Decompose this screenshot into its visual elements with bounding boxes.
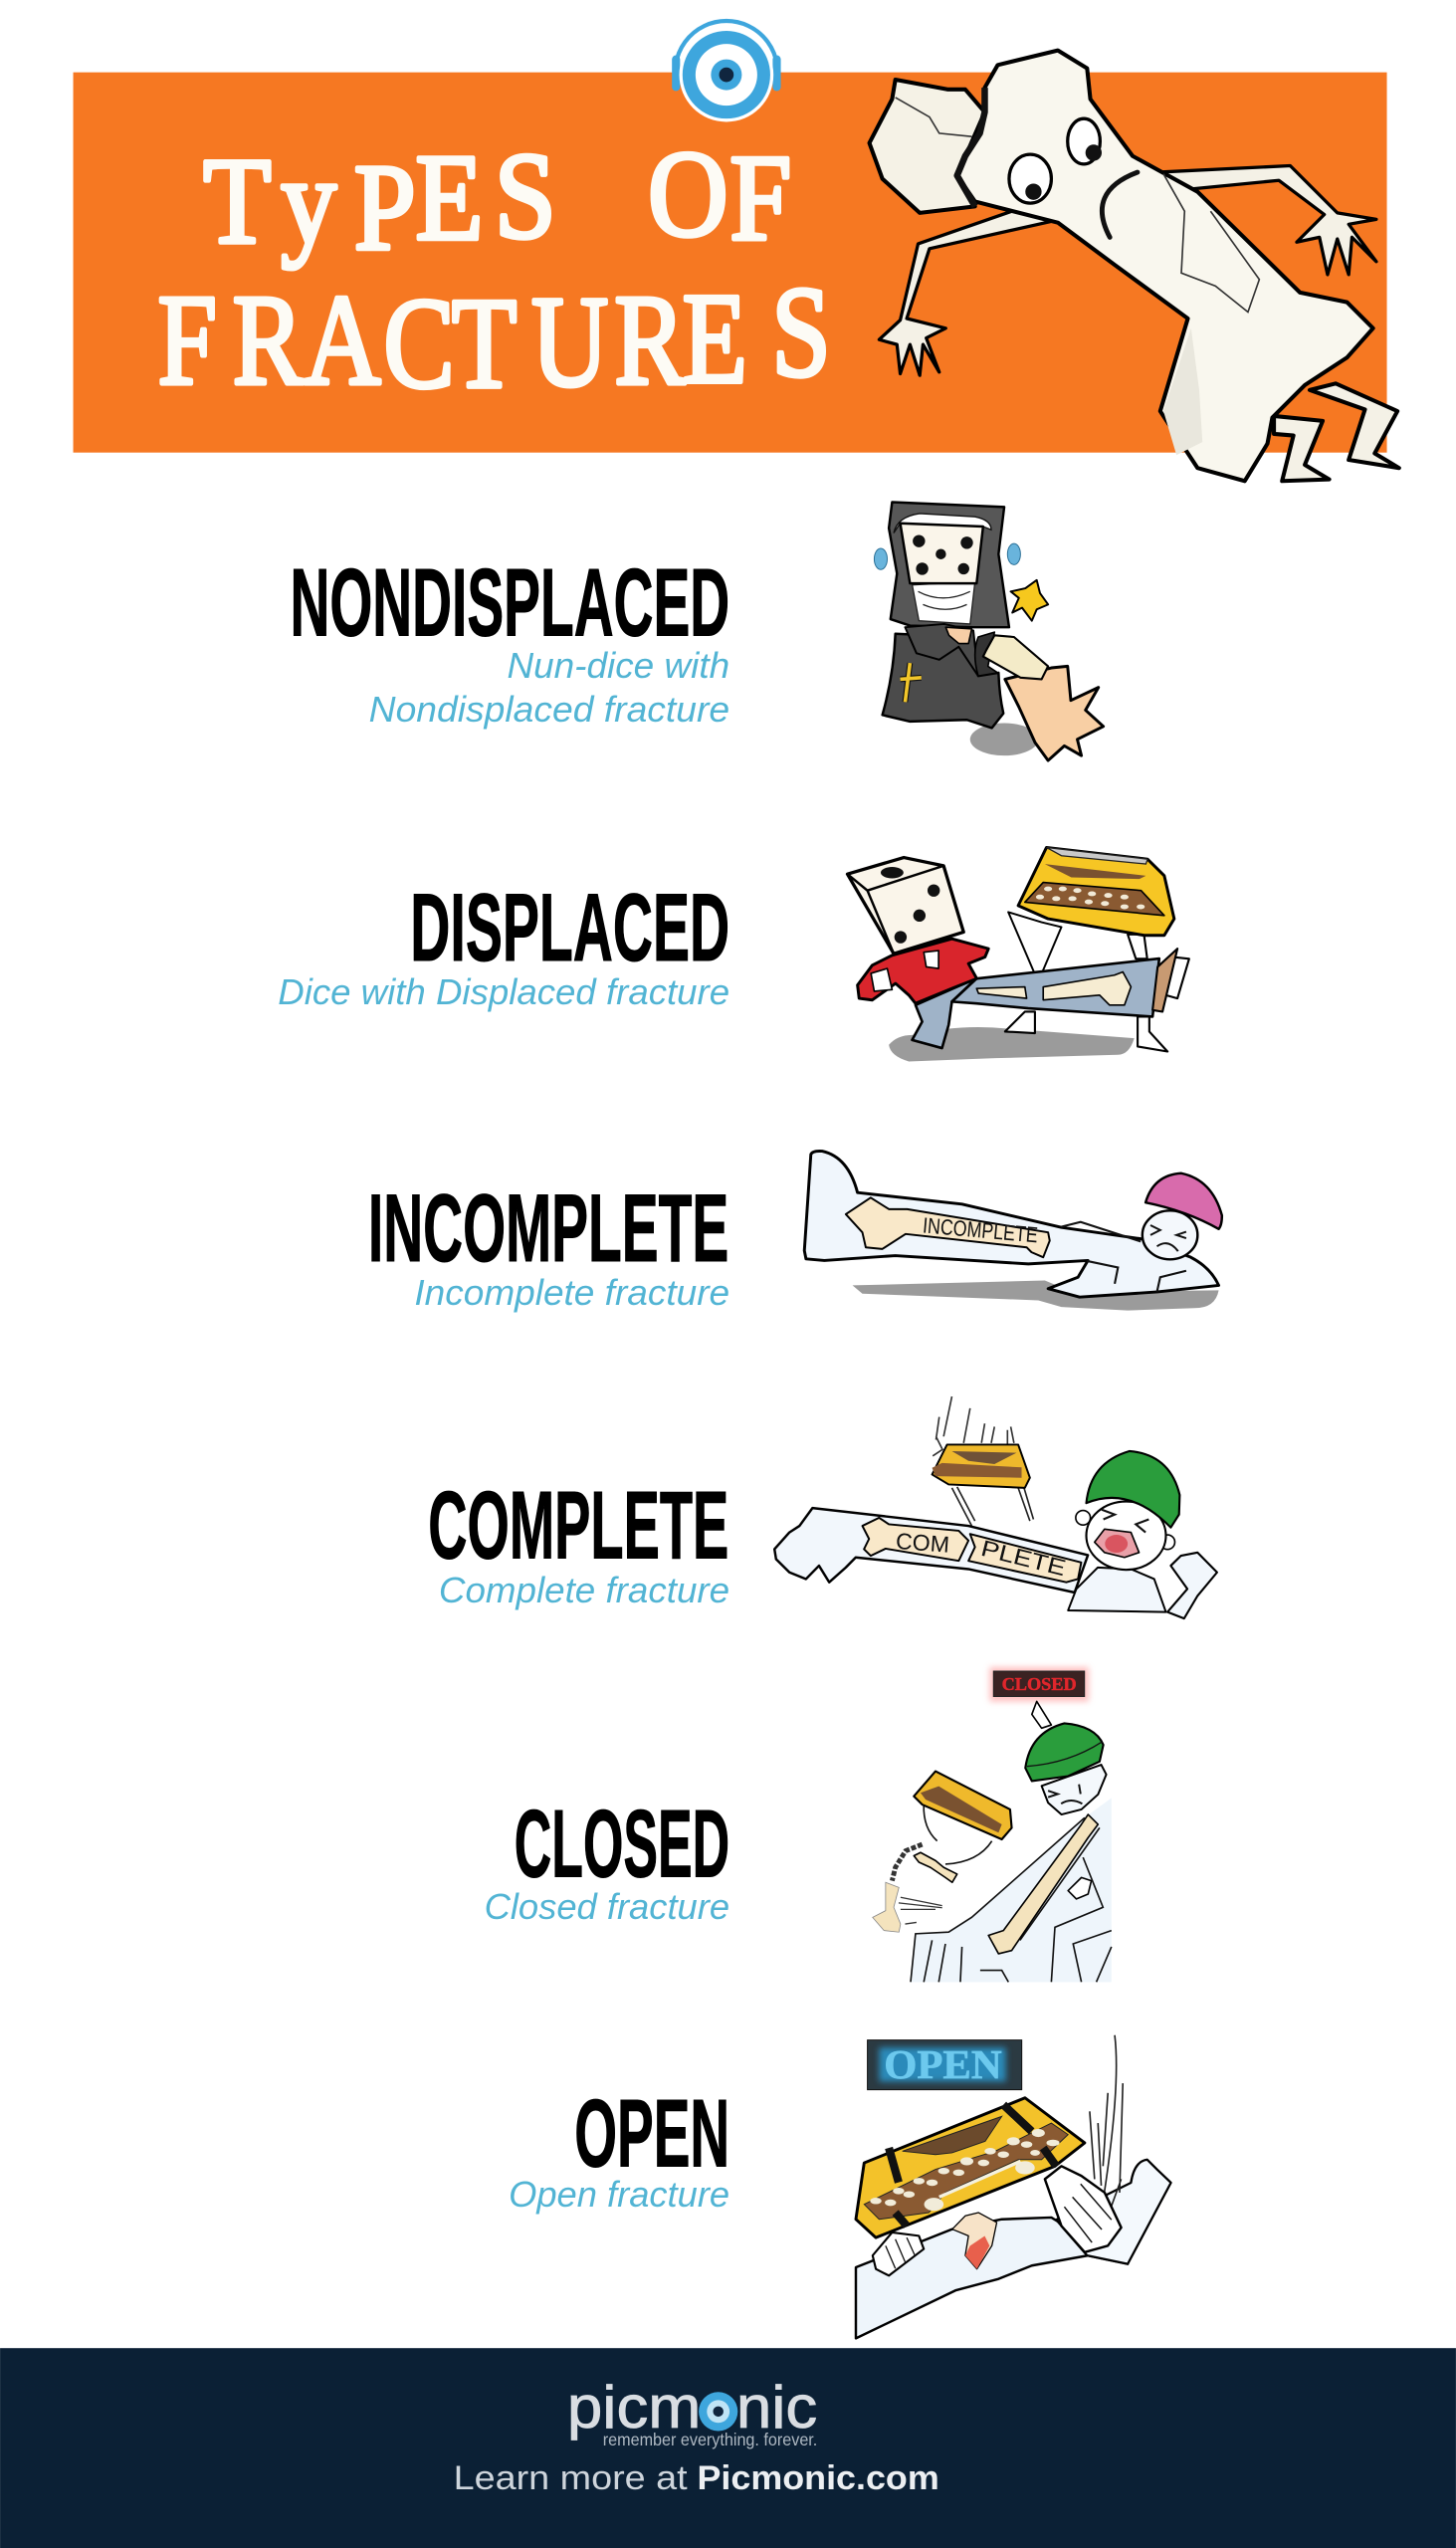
small typewriter <box>933 1444 1030 1488</box>
illustration: typewriter and man under closed sign <box>873 1667 1112 1982</box>
title <box>157 125 831 415</box>
green hat <box>1025 1723 1104 1781</box>
mascot eyes <box>1068 118 1100 164</box>
standing leg <box>912 978 976 1048</box>
illustration: typewriter breaking arm: COM <box>895 1528 950 1558</box>
left hand <box>873 2232 924 2275</box>
long bone <box>988 1814 1098 1954</box>
illustration: typewriter and open leg fracture <box>856 2035 1171 2338</box>
mascot frown <box>1102 172 1138 237</box>
caption: nun-dice <box>369 645 729 730</box>
arm <box>774 1508 1088 1592</box>
bone with label <box>846 1197 1050 1257</box>
call to action: Picmonic.com <box>697 2459 939 2497</box>
nun hand <box>945 627 971 644</box>
call to action: Learn more at <box>454 2459 688 2497</box>
heading: complete: COMPLETE <box>428 1473 728 1580</box>
green hat <box>1087 1451 1179 1528</box>
broken bone pieces <box>863 1518 968 1561</box>
fist <box>1068 1877 1092 1899</box>
dice head <box>848 858 963 954</box>
heading: incomplete: INCOMPLETE <box>368 1175 728 1282</box>
illustration: man with incomplete leg fracture <box>804 1151 1222 1311</box>
typewriter legs <box>1008 912 1062 981</box>
hand holding foot <box>1045 2166 1122 2252</box>
row: closed <box>485 1667 1112 1982</box>
panel: footer <box>0 2348 1456 2548</box>
icon: picmonic eye logo <box>672 21 781 121</box>
illustration: man with incomplete leg fracture: INCOMPLETE <box>922 1212 1039 1247</box>
nun veil <box>889 502 1009 627</box>
illustration: typewriter breaking arm: PLETE <box>978 1535 1069 1581</box>
pink hat <box>1145 1173 1222 1229</box>
mascot left leg <box>1274 416 1330 481</box>
speed lines <box>1090 2035 1123 2216</box>
open sign: OPEN <box>884 2042 1002 2087</box>
row: complete <box>428 1396 1217 1618</box>
caption: nun-dice: Nun-dice with <box>507 645 729 686</box>
head <box>1076 1511 1091 1525</box>
closed sign: CLOSED <box>1002 1674 1077 1694</box>
shadow <box>853 1281 1219 1311</box>
mascot right leg <box>1310 383 1399 468</box>
icon: sad broken bone mascot <box>870 51 1399 481</box>
tagline: remember everything. forever. <box>603 2430 817 2449</box>
caption: closed: Closed fracture <box>485 1886 729 1927</box>
mascot broken head fragment <box>870 80 984 213</box>
speed lines <box>933 1396 1014 1456</box>
exposed bone <box>983 635 1048 679</box>
mascot left arm <box>879 201 1053 375</box>
caption: open: Open fracture <box>509 2174 729 2215</box>
icon: wordmark eye <box>699 2392 737 2431</box>
illustration: typewriter breaking arm <box>774 1396 1217 1618</box>
chain and bone nunchucks <box>892 1844 923 1881</box>
picmonic wordmark: picmonic <box>567 2373 817 2441</box>
typewriter legs <box>951 1487 1033 1526</box>
sleeve cuff <box>975 632 998 676</box>
swinging arm <box>924 1805 992 1864</box>
kicking leg with displaced bone <box>951 958 1159 1016</box>
shadow <box>889 1027 1135 1061</box>
keyboard <box>864 2123 1068 2220</box>
heading: open: OPEN <box>574 2080 729 2187</box>
open sign <box>868 2040 1022 2090</box>
heading: closed: CLOSED <box>515 1792 729 1898</box>
call to action <box>454 2459 939 2497</box>
typewriter <box>856 2098 1085 2237</box>
illustration: nun with dice head and fractured arm <box>874 502 1104 760</box>
heading: displaced: DISPLACED <box>410 875 729 981</box>
leg <box>856 2218 1128 2338</box>
head <box>1042 1765 1107 1814</box>
typewriter <box>1018 847 1174 936</box>
row: nondisplaced <box>291 502 1104 760</box>
title: TyPES <box>203 127 556 276</box>
panel: orange title banner <box>74 73 1387 453</box>
pain star <box>1011 580 1048 621</box>
nun robe <box>883 634 1003 728</box>
gold cross <box>901 663 922 702</box>
open wound <box>952 2213 997 2269</box>
raised finger <box>1032 1701 1051 1728</box>
illustration: dice kicking typewriter <box>848 847 1189 1061</box>
title: OF <box>648 125 791 266</box>
white veil band <box>894 514 991 533</box>
row: incomplete <box>368 1151 1222 1313</box>
caption: nun-dice: Nondisplaced fracture <box>369 689 729 730</box>
caption: incomplete: Incomplete fracture <box>414 1272 729 1313</box>
nun sleeve <box>905 624 978 676</box>
crying mouth <box>1095 1529 1140 1558</box>
torso and hand <box>1068 1568 1166 1612</box>
mascot crack <box>957 88 984 206</box>
head <box>1143 1210 1197 1259</box>
closed sign <box>989 1667 1089 1701</box>
fractured hand <box>1005 666 1104 760</box>
mascot main bone <box>957 51 1373 481</box>
foot <box>1166 957 1189 998</box>
title: FRACTURES <box>157 260 831 415</box>
row: open <box>509 2035 1171 2338</box>
typewriter <box>914 1772 1012 1839</box>
speed lines <box>899 1897 942 1924</box>
mascot right arm <box>1157 166 1376 275</box>
body <box>911 1798 1112 1982</box>
caption: dice: Dice with Displaced fracture <box>278 971 729 1012</box>
row: displaced <box>278 847 1189 1061</box>
foot <box>1056 2160 1171 2264</box>
red hoodie <box>858 939 988 1003</box>
nun wimple <box>913 581 975 624</box>
sweat drops <box>874 548 888 569</box>
dice face <box>901 524 983 583</box>
leg and body <box>804 1151 1219 1297</box>
caption: complete: Complete fracture <box>439 1570 729 1610</box>
heading: nondisplaced: NONDISPLACED <box>291 549 729 656</box>
